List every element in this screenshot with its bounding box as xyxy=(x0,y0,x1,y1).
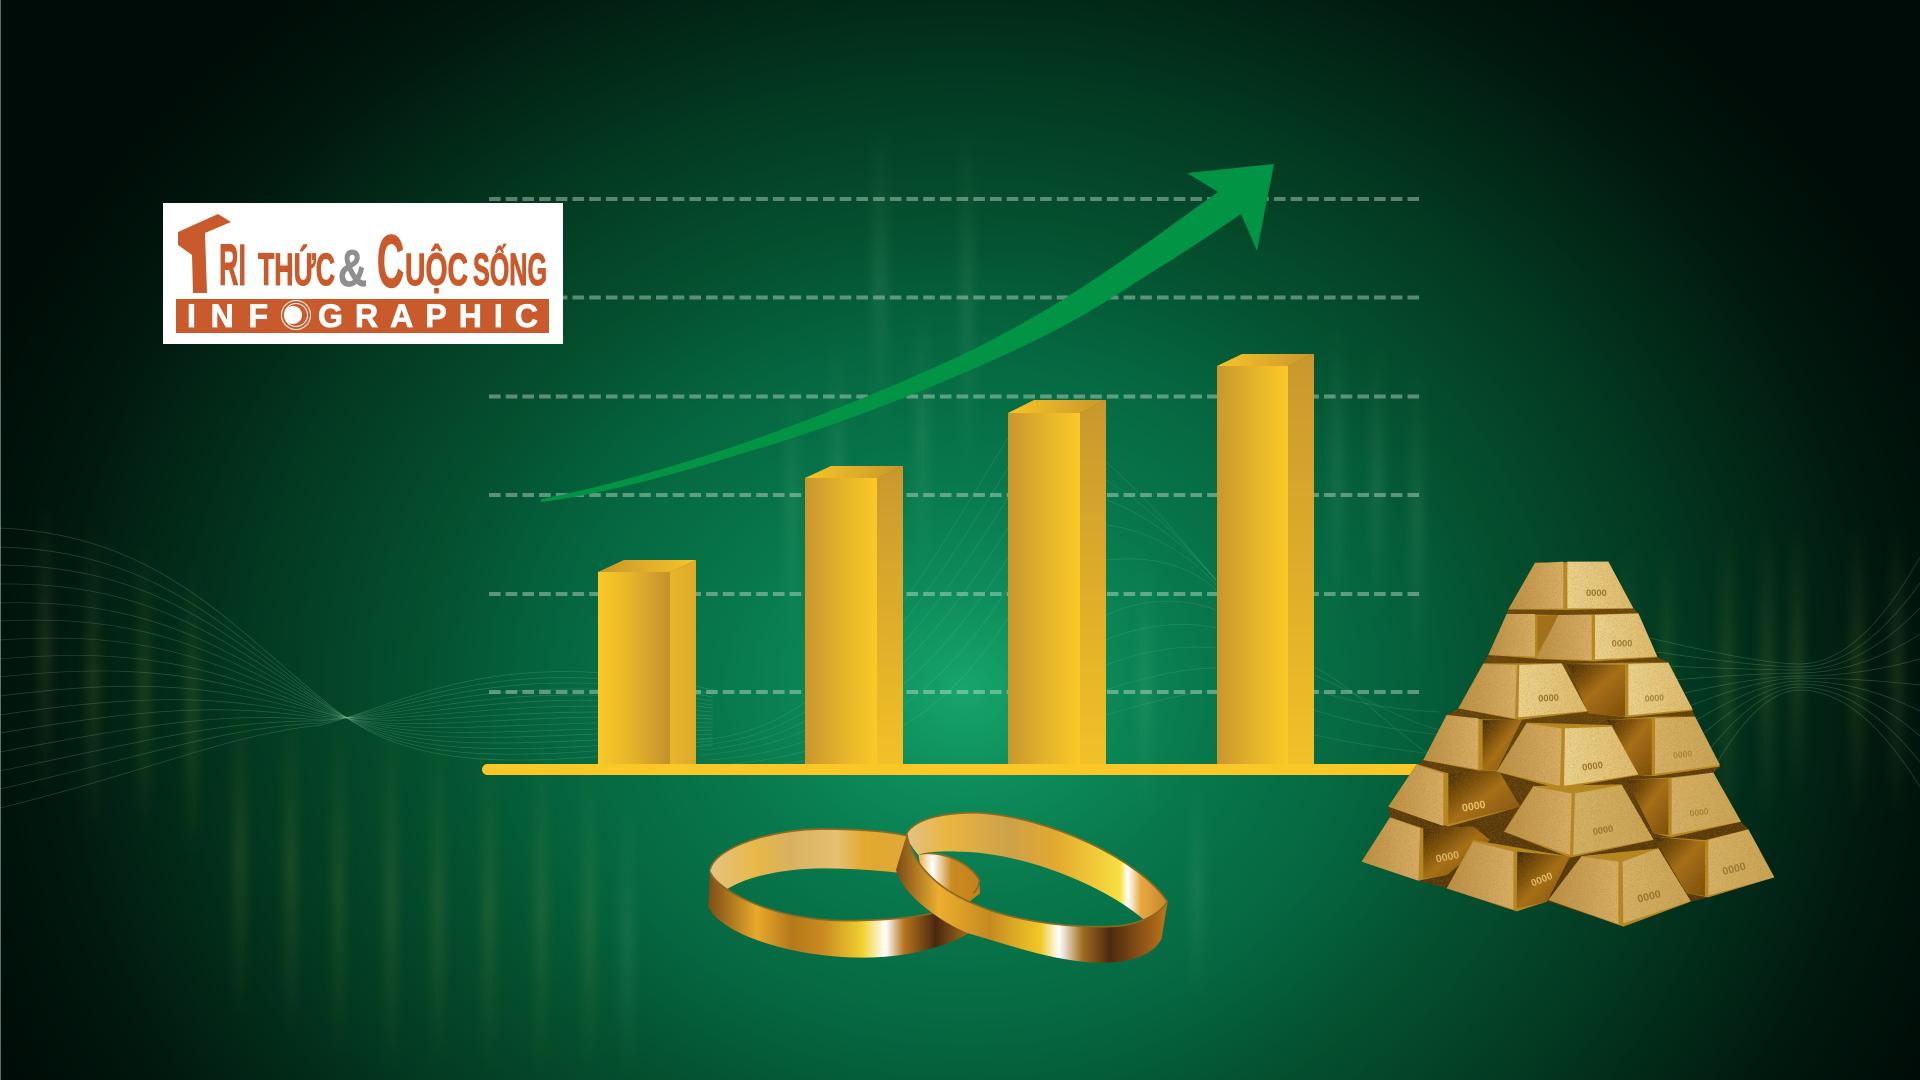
gold bar: row 3 left xyxy=(1458,663,1587,720)
right ring xyxy=(896,813,1167,963)
gold bar: row 2 right xyxy=(1537,613,1657,661)
wedding rings xyxy=(708,813,1167,963)
gold bar: row 4 left back xyxy=(1423,715,1522,771)
logo T mark xyxy=(178,214,231,293)
gold bar: row 4 centre xyxy=(1497,723,1638,789)
gold bar: row 6 far left: 0000 xyxy=(1435,849,1461,866)
logo: Tri Thuc & Cuoc Song Infographic: RI xyxy=(219,233,246,298)
gold bar: row 6 far left xyxy=(1362,817,1490,881)
bar 2 xyxy=(805,466,903,764)
gold bar pyramid xyxy=(1362,562,1774,927)
bar 1 xyxy=(598,560,696,764)
logo wordmark UOC: UỘC xyxy=(405,244,468,295)
gold bar: row 6 middle left xyxy=(1447,840,1570,911)
gold bar: row 5 left xyxy=(1388,764,1520,827)
logo banner text left: INF xyxy=(187,298,268,334)
gold bar: row 5 right xyxy=(1627,773,1741,837)
gold bar: top: 0000 xyxy=(1586,588,1607,598)
gold bar: row 4 centre: 0000 xyxy=(1582,760,1604,773)
bar 3 xyxy=(1008,400,1106,764)
gold bar: row 5 centre xyxy=(1504,784,1653,858)
gold bar: row 5 right: 0000 xyxy=(1689,806,1710,819)
logo banner text right: GRAPHIC xyxy=(318,298,538,334)
logo background xyxy=(163,203,563,344)
left ring xyxy=(708,829,980,958)
logo wordmark SONG: SỐNG xyxy=(473,244,547,295)
chart baseline xyxy=(482,764,1422,775)
logo banner xyxy=(176,299,549,333)
logo large C: C xyxy=(377,220,404,303)
gold bar: row 6 far right: 0000 xyxy=(1721,861,1747,878)
gold bar: row 3 left: 0000 xyxy=(1538,693,1559,704)
wave lines right xyxy=(1650,557,1920,787)
gold bar: row 2 left xyxy=(1488,614,1560,659)
wave lines left xyxy=(0,528,713,808)
gold bar: row 4 right back: 0000 xyxy=(1672,748,1693,760)
gold bar: row 5 centre: 0000 xyxy=(1592,824,1614,837)
gold bar: row 2 right: 0000 xyxy=(1612,639,1632,649)
left edge hairline xyxy=(0,0,1,1080)
logo: Tri Thuc & Cuoc Song Infographic xyxy=(163,203,563,344)
bar chart xyxy=(598,354,1314,764)
gold bar: top xyxy=(1508,562,1633,610)
chart gridlines xyxy=(489,199,1421,692)
gold bar: row 6 middle left: 0000 xyxy=(1530,871,1555,889)
bar 4 xyxy=(1217,354,1314,764)
gold bar: row 6 far right xyxy=(1653,829,1774,897)
logo swirl icon xyxy=(282,300,310,330)
gold bar: row 5 left: 0000 xyxy=(1461,799,1487,815)
gold bar: row 4 right back xyxy=(1607,717,1720,776)
pyramid backing shadow xyxy=(1362,562,1774,926)
logo wordmark THUC: THỨC xyxy=(258,244,335,295)
gold bar: row 6 front xyxy=(1548,848,1691,927)
gold bar: row 6 front: 0000 xyxy=(1636,888,1662,906)
gold bar: row 3 right back xyxy=(1567,663,1693,717)
gold bar: row 3 right back: 0000 xyxy=(1644,692,1665,704)
logo ampersand: & xyxy=(338,240,367,298)
growth arrow xyxy=(541,164,1274,502)
wave lines centre xyxy=(700,435,1440,770)
